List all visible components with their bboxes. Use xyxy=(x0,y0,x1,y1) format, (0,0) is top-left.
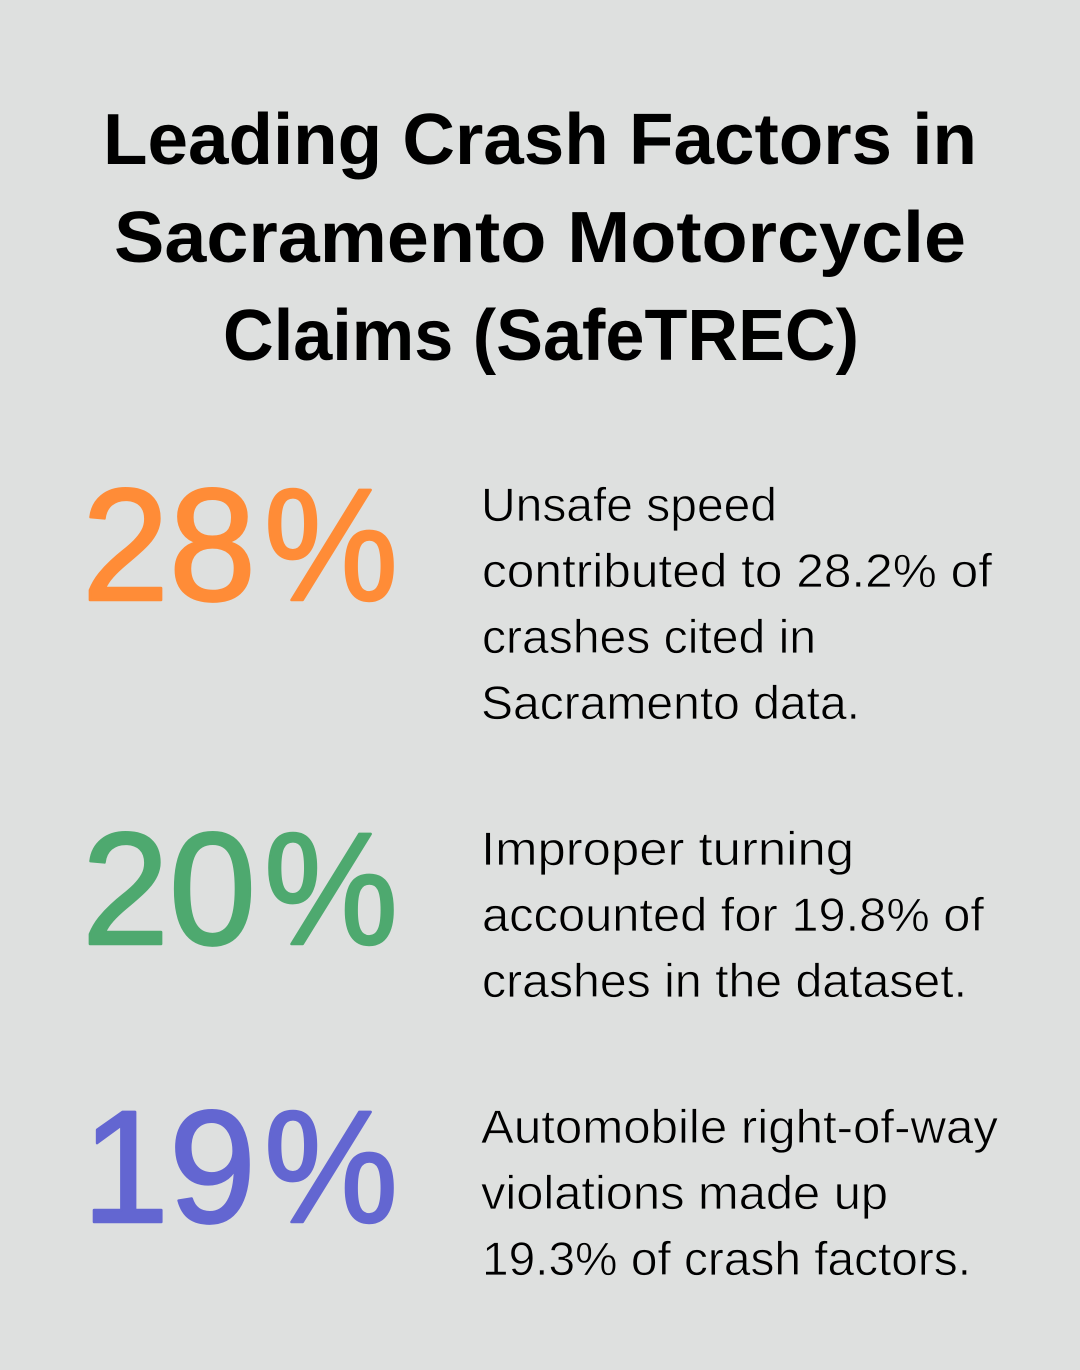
stat description: unsafe speed: crashes cited in xyxy=(482,610,816,663)
stat description: right-of-way violations: Automobile right-of-way xyxy=(481,1100,999,1153)
title: Claims (SafeTREC) xyxy=(223,296,859,376)
stat: 20% improper turning xyxy=(82,799,985,1007)
stat number: 20%: 20 xyxy=(82,799,256,978)
stat description: improper turning: crashes in the dataset. xyxy=(482,954,967,1007)
title: Leading Crash Factors in xyxy=(103,100,977,180)
stat: 19% right-of-way violations xyxy=(82,1077,999,1285)
stat number: 28%: % xyxy=(264,455,398,634)
stat description: improper turning: accounted for 19.8% of xyxy=(482,888,985,941)
stat description: improper turning xyxy=(481,822,985,1007)
stat description: right-of-way violations xyxy=(481,1100,999,1285)
stat number: 19% xyxy=(82,1077,398,1256)
stat number: 20%: % xyxy=(264,799,398,978)
stat number: 28%: 28 xyxy=(82,455,256,634)
stat number: 19%: % xyxy=(264,1077,398,1256)
stat number: 28% xyxy=(82,455,398,634)
stat description: right-of-way violations: 19.3% of crash factors. xyxy=(482,1232,971,1285)
title: Sacramento Motorcycle xyxy=(114,198,966,278)
stat description: improper turning: Improper turning xyxy=(481,822,854,875)
stat description: unsafe speed: contributed to 28.2% of xyxy=(482,544,993,597)
stat: 28% unsafe speed xyxy=(82,455,993,729)
stat description: unsafe speed: Sacramento data. xyxy=(481,676,860,729)
stat description: right-of-way violations: violations made up xyxy=(481,1166,888,1219)
stat description: unsafe speed: Unsafe speed xyxy=(481,478,777,531)
stat number: 20% xyxy=(82,799,398,978)
stat description: unsafe speed xyxy=(481,478,993,729)
title xyxy=(103,100,977,376)
stat number: 19%: 19 xyxy=(82,1077,256,1256)
